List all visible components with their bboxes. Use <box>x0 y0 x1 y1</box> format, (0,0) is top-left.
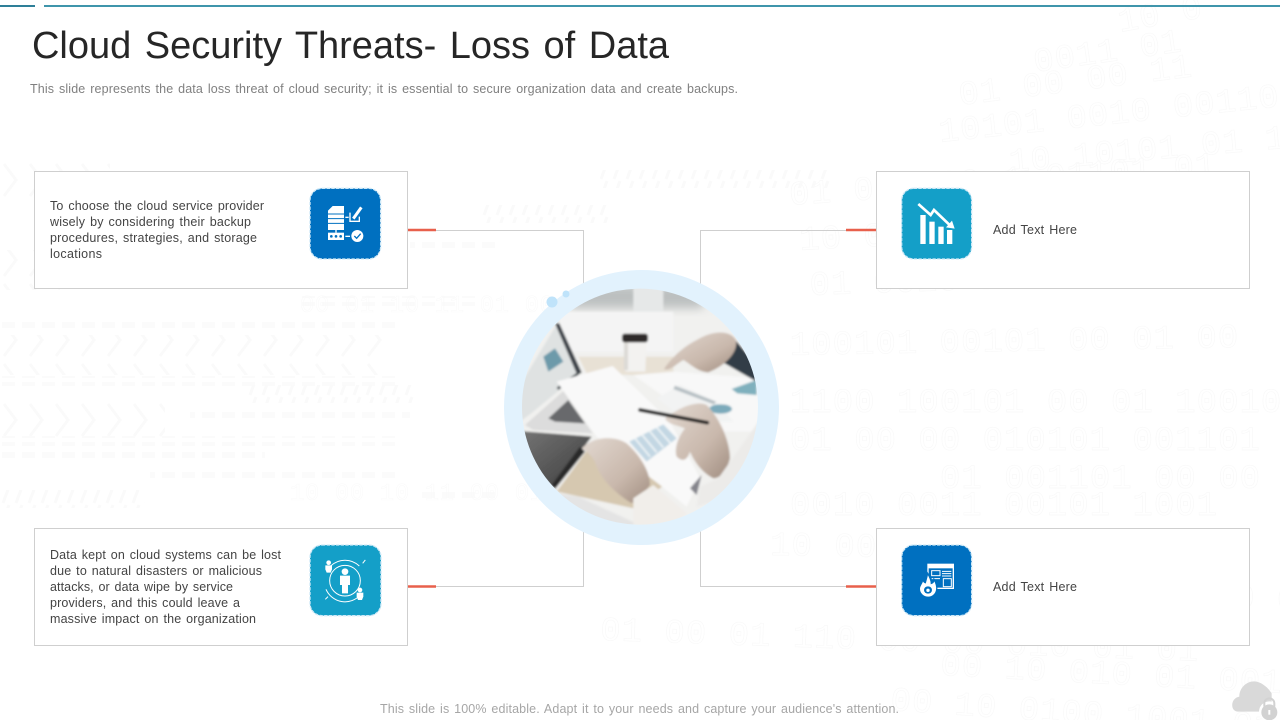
wooden desk <box>557 451 662 509</box>
background watermark: binary digits and chevrons: 01 00 00 11 <box>957 50 1195 116</box>
icon: people in orbit <box>310 545 381 616</box>
background watermark: binary digits and chevrons: 01 0010 1 01 00 0101 <box>809 253 1238 306</box>
holding hand right <box>665 403 730 478</box>
document <box>557 366 700 507</box>
connectors <box>408 230 876 586</box>
card text: attacks, or data wipe by service <box>50 580 233 594</box>
card text: Add Text Here <box>993 223 1077 237</box>
laptop <box>522 327 576 420</box>
background watermark: binary digits and chevrons: 01 00 100 1 01101 01 <box>788 148 1218 216</box>
panel: bottom-right card <box>876 528 1250 646</box>
card text: To choose the cloud service provider <box>50 199 264 213</box>
background watermark: binary digits and chevrons: 00 01 10 11 01 00 <box>300 293 555 320</box>
background watermark: binary digits and chevrons: 01 001101 00 00 <box>940 461 1261 499</box>
card text: due to natural disasters or malicious <box>50 564 262 578</box>
background watermark: binary digits and chevrons: 10101 0010 00110 <box>937 79 1280 153</box>
card text: massive impact on the organization <box>50 612 256 626</box>
background watermark: binary digits and chevrons: 100101 00101 00 01 00 <box>790 320 1240 366</box>
background watermark: binary digits and chevrons: 01 00 00 010101 001101 <box>790 423 1261 461</box>
card text <box>49 199 264 261</box>
subtitle: This slide represents the data loss threat of cloud security; it is essential to secure organization data and create backups. <box>30 82 738 96</box>
card text: locations <box>50 247 102 261</box>
icon: cloud with padlock <box>1232 681 1280 720</box>
icon: falling bar chart <box>902 188 972 259</box>
background watermark: binary digits and chevrons: 01 00 01 110 00 00 010 01 01 <box>600 613 1200 672</box>
background watermark: binary digits and chevrons: 0011 01 <box>1031 24 1185 83</box>
center ring with photo <box>504 270 779 545</box>
card text: procedures, strategies, and storage <box>50 231 257 245</box>
title: Cloud Security Threats- Loss of Data <box>32 25 670 67</box>
notebook <box>520 431 592 488</box>
photo: hands reviewing documents at a desk <box>517 282 763 532</box>
panel: top-right card <box>876 172 1250 288</box>
footer note: This slide is 100% editable. Adapt it to your needs and capture your audience's attention. <box>380 702 899 716</box>
card text: wisely by considering their backup <box>49 215 251 229</box>
background watermark: binary digits and chevrons: 10 00 10 11 00 01 10 <box>290 481 590 508</box>
panel: top-left provider card <box>34 172 408 288</box>
sleeves <box>632 484 658 524</box>
coffee cup <box>626 356 646 372</box>
panel: bottom-left data loss card <box>34 528 408 646</box>
icon: checklist and approval <box>310 188 381 259</box>
pen <box>640 410 707 423</box>
background watermark: binary digits and chevrons: 10 0001 0101 0010 10 <box>770 528 1198 573</box>
background watermark: binary digits and chevrons: 10 01 00 1 0 1000 10 <box>799 201 1228 261</box>
top accent rule <box>0 5 1280 7</box>
card text <box>50 548 282 626</box>
holding hand left <box>582 438 650 503</box>
card text: providers, and this could leave a <box>50 596 240 610</box>
card text: Data kept on cloud systems can be lost <box>50 548 282 562</box>
icon: browser window on fire <box>902 545 972 616</box>
ring <box>504 270 779 545</box>
background watermark: binary digits and chevrons: 0010 0011 00101 1001 <box>790 488 1218 526</box>
card text: Add Text Here <box>993 580 1077 594</box>
pointing hand <box>724 340 756 382</box>
bar chart on paper <box>629 424 677 462</box>
